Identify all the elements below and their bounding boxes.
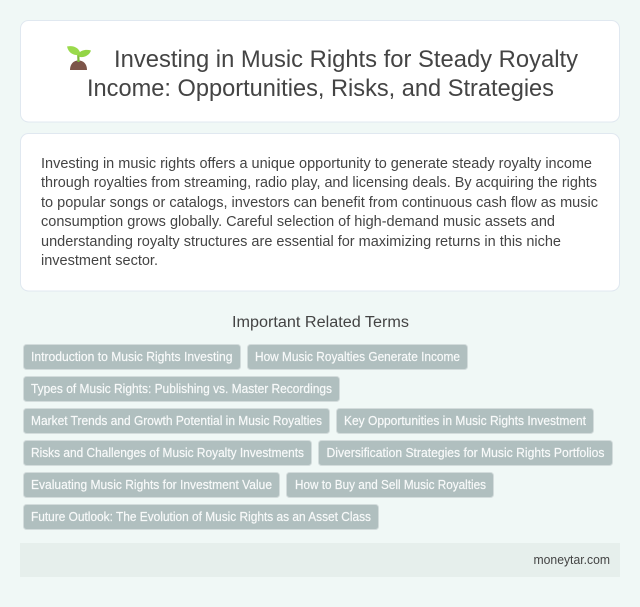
tag: introduction bbox=[24, 344, 240, 370]
footer source text: moneytar.com bbox=[534, 553, 610, 567]
tag: buy and sell: How to Buy and Sell Music Royalties bbox=[295, 477, 486, 492]
text block: description: investment sector. bbox=[41, 253, 158, 269]
text block: description: understanding royalty structures are essential for maximizing returns in this niche bbox=[41, 234, 561, 250]
text block: description: to popular songs or catalogs, investors can benefit from continuous cash flow as music bbox=[41, 195, 599, 211]
tag: how royalties generate income: How Music Royalties Generate Income bbox=[255, 349, 460, 364]
footer bar bbox=[20, 543, 620, 577]
tag: key opportunities: Key Opportunities in Music Rights Investment bbox=[344, 413, 586, 428]
tag: future outlook bbox=[24, 504, 378, 530]
text block: description bbox=[41, 156, 599, 269]
heading: important related terms: Important Related Terms bbox=[232, 314, 409, 331]
title: Income: Opportunities, Risks, and Strategies bbox=[87, 75, 554, 102]
tag: diversification strategies bbox=[318, 440, 612, 466]
tag: evaluating music rights bbox=[24, 472, 280, 498]
tag: risks and challenges: Risks and Challenges of Music Royalty Investments bbox=[31, 445, 304, 460]
title bbox=[87, 46, 579, 102]
icon: sprout bbox=[67, 46, 91, 70]
tag: risks and challenges bbox=[24, 440, 312, 466]
tag: types of rights bbox=[24, 376, 340, 402]
panel: header card bbox=[20, 20, 620, 122]
tag: types of rights: Types of Music Rights: Publishing vs. Master Recordings bbox=[31, 381, 332, 396]
text block: description: Investing in music rights offers a unique opportunity to generate steady royalty income bbox=[41, 156, 592, 172]
text block: description: through royalties from streaming, radio play, and licensing deals. By acquiring the rights bbox=[41, 175, 597, 191]
tag: buy and sell bbox=[286, 472, 494, 498]
title: Investing in Music Rights for Steady Royalty bbox=[114, 46, 579, 73]
tag: key opportunities bbox=[336, 408, 594, 434]
tag: future outlook: Future Outlook: The Evolution of Music Rights as an Asset Class bbox=[31, 509, 371, 524]
tag: diversification strategies: Diversification Strategies for Music Rights Portfolios bbox=[326, 445, 604, 460]
tag: evaluating music rights: Evaluating Music Rights for Investment Value bbox=[31, 477, 272, 492]
panel: description card bbox=[20, 134, 620, 291]
tag: market trends: Market Trends and Growth Potential in Music Royalties bbox=[31, 413, 322, 428]
tag: market trends bbox=[24, 408, 330, 434]
panel: related term tags bbox=[24, 344, 612, 530]
tag: introduction: Introduction to Music Rights Investing bbox=[31, 349, 232, 364]
text block: description: consumption grows globally. Careful selection of high-demand music assets and bbox=[41, 214, 555, 230]
tag: how royalties generate income bbox=[248, 344, 468, 370]
